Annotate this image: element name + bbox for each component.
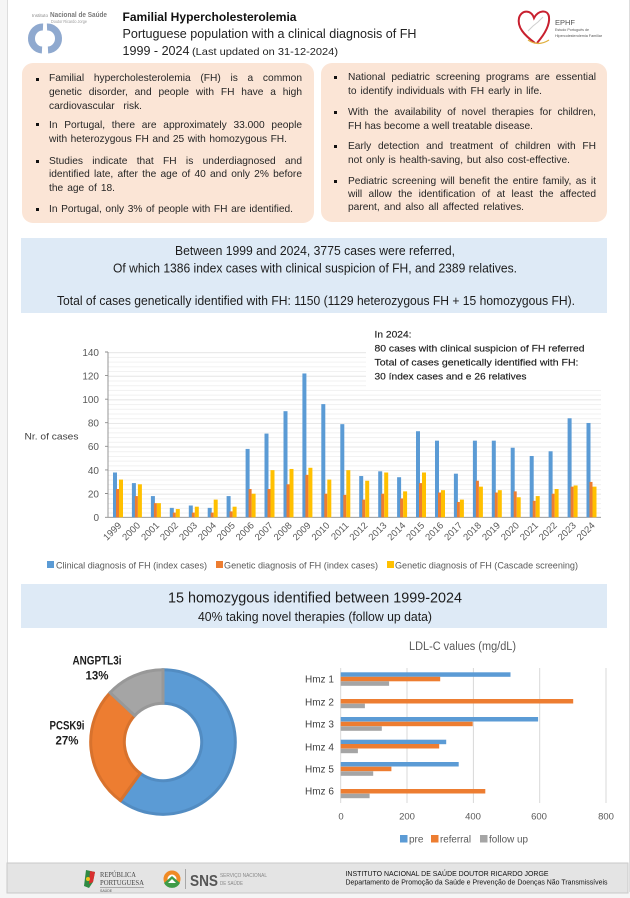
x axis year labels: 2019 (480, 520, 503, 543)
logo: SNS: SNS (190, 873, 218, 890)
x axis labels: 400 (465, 812, 481, 822)
x axis year labels: 2023 (556, 520, 579, 543)
point: family benefit: will allow the identification of at least the affected (348, 189, 596, 200)
point: family benefit: Pediatric screening will benefit the entire family, as it (348, 176, 596, 187)
category labels: Hmz 4 (305, 742, 334, 754)
callout: 2024 figures (374, 330, 584, 382)
point: early detection: Early detection and treatment of children with FH (348, 141, 596, 152)
band: referral summary: Between 1999 and 2024, 3775 cases were referred, (175, 244, 455, 258)
band: referral summary: Total of cases genetically identified with FH: 1150 (1129 heterozygous FH + 15 homozygous FH). (57, 294, 575, 308)
point: national screening: to identify individuals with FH early in life. (348, 86, 542, 97)
point: family benefit: parent, and also all affected relatives. (348, 202, 524, 213)
fact: underdiagnosis (36, 156, 302, 194)
y axis labels: 140 (82, 348, 99, 359)
logo: Instituto Nacional de Saude: Doutor Ricardo Jorge (51, 19, 87, 24)
category labels: Hmz 5 (305, 764, 334, 776)
x axis year labels: 2002 (158, 520, 181, 543)
logo: Republica Portuguesa: SAÚDE (100, 889, 113, 893)
logo: EPHF heart: Hipercolesterolemia Familiar (555, 34, 603, 38)
y axis labels (82, 348, 99, 524)
fact: underdiagnosis: the age of 18. (49, 183, 115, 194)
y axis labels: 60 (88, 442, 99, 453)
legend (47, 560, 578, 572)
series: referral (341, 677, 573, 794)
y axis labels: 120 (82, 372, 99, 382)
legend: Clinical diagnosis of FH (index cases) (56, 560, 207, 572)
label: ANGPTL3i (72, 656, 122, 682)
title: 1999 - 2024 (122, 44, 190, 58)
chart: LDL-C values (305, 641, 614, 846)
institute text (346, 869, 608, 886)
y axis labels: 20 (88, 489, 99, 500)
logo: Republica Portuguesa: PORTUGUESA (100, 879, 144, 887)
footer (7, 863, 628, 893)
x axis labels: 0 (338, 812, 344, 822)
legend: referral (440, 834, 471, 846)
x axis year labels: 2004 (196, 520, 219, 543)
point: novel therapies: With the availability of novel therapies for children, (348, 107, 596, 118)
x axis year labels: 2007 (253, 520, 276, 543)
label: PCSK9i: 27% (55, 736, 79, 748)
logo: Instituto Nacional de Saude: Nacional de Saúde (50, 12, 107, 19)
fact: 3 percent identified: In Portugal, only 3% of people with FH are identified. (49, 204, 293, 215)
x axis year labels: 2009 (291, 520, 314, 543)
point: early detection: not only is health-saving, but also cost-effective. (348, 155, 570, 166)
x axis year labels: 2011 (329, 520, 351, 543)
label: PCSK9i: PCSK9i (50, 720, 84, 732)
x axis year labels: 2021 (518, 520, 541, 543)
x axis year labels: 2014 (385, 520, 408, 543)
logo: Republica Portuguesa: REPÚBLICA (100, 871, 136, 879)
band: homozygous summary: 40% taking novel therapies (follow up data) (198, 610, 432, 624)
fact: underdiagnosis: Studies indicate that FH is underdiagnosed and (49, 156, 302, 167)
fact: FH common disorder: genetic disorder, and people with FH have a high (49, 87, 302, 98)
category labels: Hmz 2 (305, 698, 334, 708)
x axis year labels: 2015 (404, 520, 427, 543)
band: referral summary: Of which 1386 index cases with clinical suspicion of FH, and 2389 relatives. (113, 262, 517, 276)
logo: Instituto Nacional de Saude: Instituto (32, 13, 48, 18)
category labels: Hmz 6 (305, 786, 334, 798)
panel: left key facts (22, 63, 314, 223)
y axis labels: 100 (82, 395, 99, 406)
fact: prevalence in Portugal (36, 120, 302, 145)
legend: follow up (489, 834, 528, 846)
institute text: INSTITUTO NACIONAL DE SAÚDE DOUTOR RICARDO JORGE (346, 869, 548, 878)
fact: prevalence in Portugal: with heterozygous FH and 25 with homozygous FH. (49, 134, 287, 145)
x axis year labels: 2008 (272, 520, 295, 543)
fact: FH common disorder: Familial hypercholesterolemia (FH) is a common (49, 73, 302, 84)
x axis labels: 800 (598, 812, 614, 822)
fact: underdiagnosis: identified late, after the age of 40 and only 2% before (49, 169, 302, 180)
callout: 2024 figures: In 2024: (374, 330, 412, 340)
institute text: Departamento de Promoção da Saúde e Prevenção de Doenças Não Transmissíveis (346, 878, 608, 886)
series: follow up (341, 681, 389, 798)
x axis year labels: 1999 (101, 520, 124, 543)
point: national screening (334, 72, 596, 97)
y axis labels: 0 (93, 513, 99, 524)
x axis labels: 200 (399, 812, 415, 822)
x axis labels: 600 (531, 812, 547, 822)
x axis year labels: 2012 (348, 520, 370, 543)
point: national screening: National pediatric screening programs are essential (348, 72, 596, 83)
x axis year labels: 2005 (215, 520, 238, 543)
donut chart: novel therapies (91, 670, 235, 814)
logo: EPHF heart: EPHF (555, 18, 575, 27)
callout: 2024 figures: 80 cases with clinical suspicion of FH referred (374, 344, 584, 354)
band: referral summary (21, 238, 607, 313)
callout: 2024 figures: 30 índex cases and e 26 relatives (374, 372, 527, 382)
x axis year labels: 2006 (234, 520, 257, 543)
y axis labels: 40 (88, 466, 99, 477)
x axis year labels: 2022 (537, 520, 560, 543)
segment: no novel therapy (120, 670, 235, 814)
title: Portuguese population with a clinical diagnosis of FH (122, 27, 416, 41)
callout: 2024 figures: Total of cases genetically identified with FH: (374, 358, 578, 368)
series: clinical diagnosis (113, 373, 590, 517)
fact: FH common disorder: cardiovascular risk. (49, 101, 142, 112)
y axis labels: 80 (88, 419, 99, 430)
legend: Genetic diagnosis of FH (index cases) (224, 560, 378, 572)
panel: right pediatric screening (321, 63, 607, 222)
x axis year labels: 2024 (575, 520, 598, 543)
logo: SNS (164, 869, 267, 890)
band: homozygous summary: 15 homozygous identified between 1999-2024 (168, 590, 462, 606)
x axis year labels: 2003 (177, 520, 200, 543)
segment: ANGPTL3i (110, 670, 163, 716)
x axis year labels: 2000 (120, 520, 143, 543)
point: family benefit (334, 176, 596, 213)
logo: Instituto Nacional de Saude (31, 12, 107, 50)
point: early detection (334, 141, 596, 166)
x axis year labels: 2001 (139, 520, 162, 543)
category labels: Hmz 3 (305, 720, 334, 730)
logo: Republica Portuguesa (84, 870, 144, 893)
bar chart: cases per year (24, 325, 606, 572)
x axis labels (338, 812, 614, 822)
x axis year labels: 2018 (461, 520, 484, 543)
point: novel therapies (334, 107, 596, 132)
logo: EPHF heart (519, 11, 603, 44)
x axis year labels: 2016 (423, 520, 446, 543)
title (122, 10, 416, 58)
label: ANGPTL3i: ANGPTL3i (72, 656, 122, 668)
series: cascade screening (119, 468, 596, 517)
x axis year labels: 2010 (310, 520, 332, 543)
legend: Genetic diagnosis of FH (Cascade screening) (395, 560, 578, 572)
legend (400, 834, 528, 846)
label: ANGPTL3i: 13% (85, 670, 109, 682)
series: genetic diagnosis index cases (116, 475, 592, 517)
title: Familial Hypercholesterolemia (122, 10, 297, 24)
x axis year labels: 2020 (499, 520, 522, 543)
y axis title: Nr. of cases (24, 432, 79, 442)
category labels: Hmz 1 (305, 674, 334, 686)
chart title: LDL-C values (mg/dL) (409, 641, 516, 653)
label: PCSK9i (50, 720, 84, 748)
series: pre (341, 672, 538, 766)
fact: FH common disorder (36, 73, 302, 112)
band: homozygous summary (21, 584, 607, 628)
segment: PCSK9i (91, 693, 140, 800)
title: (Last updated on 31-12-2024) (192, 46, 338, 58)
x axis year labels (101, 520, 598, 543)
point: novel therapies: FH has become a well treatable disease. (348, 121, 533, 132)
logo: SNS: DE SAÚDE (220, 880, 243, 887)
x axis year labels: 2013 (367, 520, 389, 543)
logo: SNS: SERVIÇO NACIONAL (220, 873, 267, 879)
category labels (305, 674, 334, 798)
fact: prevalence in Portugal: In Portugal, there are approximately 33.000 people (49, 120, 302, 131)
legend: pre (409, 834, 424, 846)
logo: EPHF heart: Estudo Português de (555, 28, 589, 32)
x axis year labels: 2017 (442, 520, 465, 543)
